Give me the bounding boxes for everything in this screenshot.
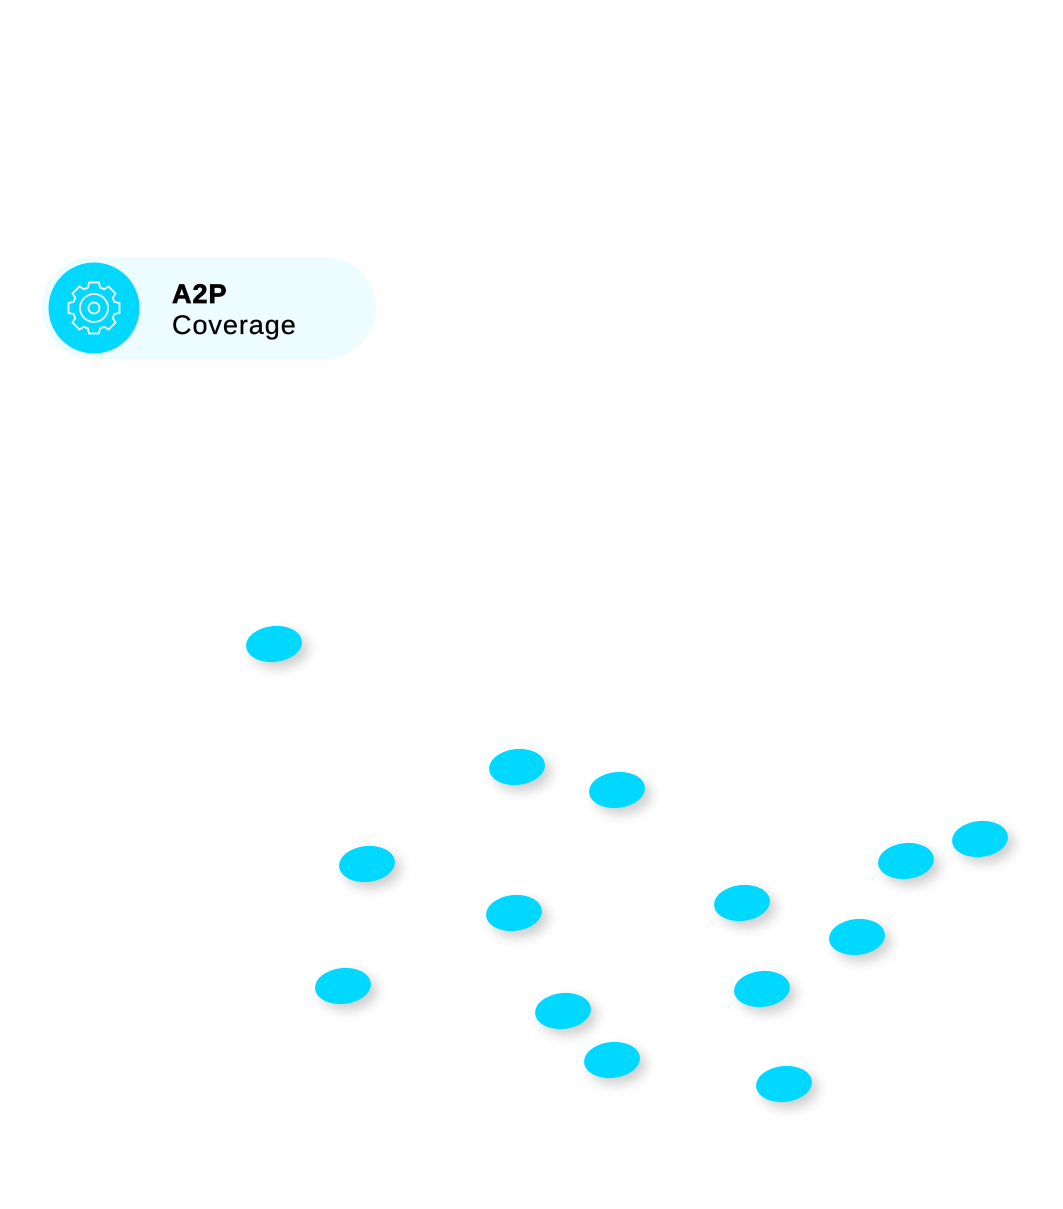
marker 3 <box>587 769 647 811</box>
marker 11 <box>754 1063 814 1105</box>
marker 4 <box>337 843 397 885</box>
legend label: Coverage: Coverage <box>172 310 297 340</box>
icon: gear in cyan circle <box>48 262 140 354</box>
marker 13 <box>876 840 936 882</box>
map markers <box>244 623 1010 1105</box>
marker 7 <box>533 990 593 1032</box>
marker 6 <box>313 965 373 1007</box>
marker 8 <box>582 1039 642 1081</box>
legend label: A2P: A2P <box>172 279 228 309</box>
marker 10 <box>732 968 792 1010</box>
marker 14 <box>950 818 1010 860</box>
pill background <box>42 257 376 359</box>
marker 12 <box>827 916 887 958</box>
marker 1 <box>244 623 304 665</box>
marker 2 <box>487 746 547 788</box>
marker 9 <box>712 882 772 924</box>
panel: A2P coverage legend pill <box>42 257 376 359</box>
marker 5 <box>484 892 544 934</box>
